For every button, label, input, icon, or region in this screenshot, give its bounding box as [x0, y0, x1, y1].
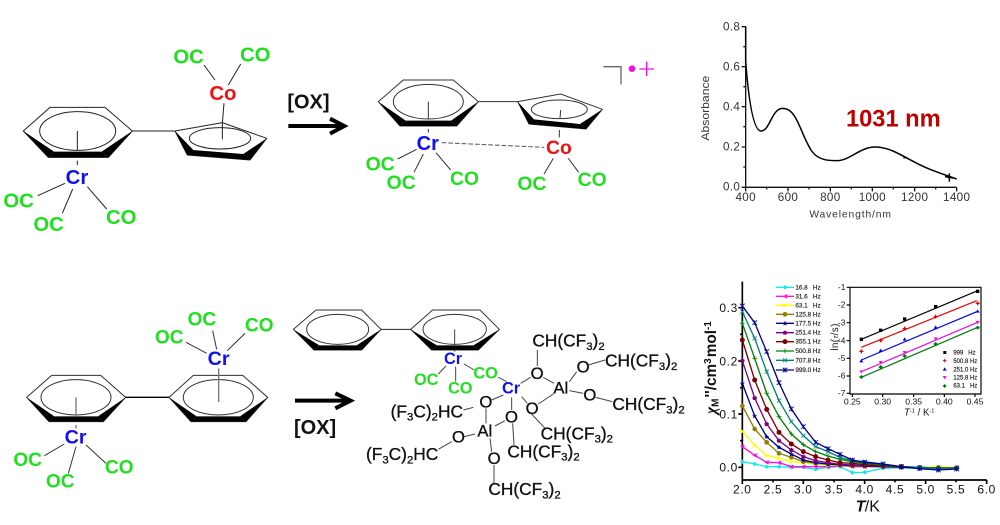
bracket and radical cation charge: [603, 62, 654, 84]
fluoroalkyl groups: HC: [413, 444, 438, 464]
x-axis tick labels: 5.5: [947, 483, 965, 497]
inset fit lines: [861, 291, 978, 377]
aluminate atoms: O: [526, 399, 539, 418]
inset x tick labels: 0.40: [936, 396, 953, 406]
fluoroalkyl groups: ): [673, 394, 678, 414]
chromium carbonyl labels: CO: [106, 207, 136, 229]
x-axis tick labels: 5.0: [916, 483, 935, 497]
aluminate atoms: O: [531, 364, 544, 383]
chart: absorbance spectrum: [700, 21, 970, 220]
y-axis title: -1: [703, 321, 714, 330]
inset legend: 500.8 Hz: [953, 359, 977, 365]
x-axis title: T/K: [856, 499, 880, 516]
fluoroalkyl groups: CH(CF: [488, 479, 542, 499]
molecule: oxidized radical cation: [366, 62, 654, 195]
fluoroalkyl groups: 2: [598, 341, 605, 353]
atom labels: OC: [188, 310, 216, 331]
aluminate atoms: O: [505, 408, 518, 427]
bonds: [38, 64, 241, 213]
atom labels: [366, 133, 607, 195]
inset y tick labels: [838, 282, 846, 398]
fluoroalkyl groups: C): [389, 444, 407, 464]
y-axis title: ''/cm: [703, 364, 720, 398]
bonds: [398, 102, 579, 174]
cobalt carbonyl labels: Co: [209, 83, 236, 105]
chromium carbonyl labels: OC: [414, 371, 439, 389]
inset x tick labels: 0.45: [967, 396, 984, 406]
aluminate atoms: O: [488, 449, 501, 468]
fluoroalkyl groups: 3: [659, 361, 665, 373]
frequency legend: 31.6 Hz: [795, 293, 821, 300]
fluoroalkyl groups: ): [549, 479, 554, 499]
x-axis tick labels: 4.5: [886, 483, 904, 497]
fluoroalkyl groups: 2: [671, 361, 677, 373]
chromium carbonyl labels: OC: [3, 190, 34, 212]
frequency legend: 707.8 Hz: [795, 357, 821, 364]
y-axis tick labels: [723, 21, 740, 194]
frequency legend: 16.8 Hz: [795, 284, 821, 291]
inset y tick labels: -7: [838, 388, 846, 398]
x-axis tick labels: 2.5: [764, 483, 782, 497]
aluminate atoms: [452, 358, 596, 468]
benzene ring: [23, 107, 132, 157]
chromium carbonyl labels: CO: [473, 364, 498, 382]
cobalt carbonyl labels: [173, 45, 270, 105]
fluoroalkyl groups: 3: [407, 412, 413, 424]
label: [OX]: [OX]: [294, 417, 336, 439]
atom labels: Cr: [417, 133, 439, 155]
y-axis tick labels: 0.0: [719, 461, 738, 475]
aluminate atoms: O: [577, 358, 590, 377]
x-axis tick labels: 1000: [859, 191, 886, 204]
y-axis tick labels: 0.6: [723, 60, 740, 73]
fluoroalkyl groups: ): [593, 331, 598, 351]
inset legend: 999 Hz: [953, 351, 976, 357]
y-axis title: 3: [703, 358, 714, 364]
fluoroalkyl groups: 2: [573, 452, 580, 464]
atom labels: Cr: [65, 426, 87, 448]
frequency legend: [776, 284, 821, 374]
cyclopentadienyl ring: [518, 94, 602, 129]
inset y tick labels: -5: [838, 353, 846, 363]
y-axis tick labels: 0.4: [723, 100, 740, 113]
atom labels: OC: [46, 472, 75, 493]
chromium carbonyl labels: OC: [33, 214, 64, 236]
frequency legend: 63.1 Hz: [795, 302, 821, 309]
y-axis title: M: [711, 399, 722, 407]
aluminate atoms: O: [583, 386, 596, 405]
fluoroalkyl groups: 3: [382, 454, 389, 466]
fluoroalkyl groups: CH(CF: [532, 331, 586, 351]
fluoroalkyl groups: 3: [595, 434, 601, 446]
peak label: 1031 nm: [846, 107, 941, 133]
chromium carbonyl labels: Cr: [444, 350, 463, 368]
chromium carbonyl labels: [414, 350, 521, 397]
x-axis tick labels: [735, 191, 970, 204]
x-axis tick labels: 4.0: [855, 483, 874, 497]
inset y tick labels: -1: [838, 282, 846, 292]
atom labels: CO: [105, 457, 133, 478]
y-axis title: Absorbance: [700, 76, 712, 141]
frequency legend: 999.0 Hz: [795, 367, 821, 374]
molecule: bis-chromium biphenyl: [13, 310, 273, 493]
inset legend: 125.8 Hz: [953, 375, 977, 381]
fluoroalkyl groups: CH(CF: [612, 394, 666, 414]
chart: out-of-phase magnetic susceptibility: [703, 282, 996, 516]
molecule: oxidized product with aluminate anion: [293, 310, 685, 501]
y-axis tick labels: 0.8: [723, 21, 740, 34]
frequency legend: 251.4 Hz: [795, 330, 821, 337]
inset axis titles: T: [904, 408, 911, 419]
fluoroalkyl groups: 2: [607, 434, 613, 446]
x-axis tick labels: 1400: [943, 191, 970, 204]
dashed Cr–Co interaction: [442, 143, 544, 147]
inset x tick labels: 0.30: [874, 396, 891, 406]
inset axis titles: ln(τ/s): [830, 323, 841, 351]
x-axis tick labels: 3.0: [794, 483, 813, 497]
x-axis tick labels: 3.5: [825, 483, 843, 497]
inset axis titles: [830, 323, 934, 419]
cobalt carbonyl labels: OC: [173, 46, 204, 68]
bonds: [44, 331, 245, 473]
bonds: [438, 329, 612, 483]
atom labels: OC: [517, 174, 546, 195]
y-axis tick labels: [719, 301, 738, 475]
left benzene ring: [27, 375, 126, 422]
inset legend: 63.1 Hz: [953, 384, 977, 390]
right benzene ring: [169, 375, 268, 422]
inset axes: [847, 287, 981, 397]
frequency legend: 125.8 Hz: [795, 311, 821, 318]
inset axis titles: -1: [910, 408, 915, 414]
fluoroalkyl groups: 2: [554, 489, 561, 501]
atom labels: CO: [245, 316, 273, 337]
aluminate atoms: O: [479, 393, 492, 412]
aluminate atoms: O: [452, 428, 465, 447]
frequency legend: 177.5 Hz: [795, 320, 821, 327]
x-axis tick labels: [733, 483, 996, 497]
inset: Arrhenius plot: [830, 282, 984, 419]
fluoroalkyl groups: 3: [586, 341, 593, 353]
x-axis tick labels: 2.0: [733, 483, 752, 497]
fluoroalkyl groups: 2: [432, 412, 438, 424]
inset axis titles: -1: [929, 408, 934, 414]
atom labels: OC: [387, 173, 416, 194]
x-axis tick labels: 600: [778, 191, 798, 204]
atom labels: OC: [13, 450, 42, 471]
x-axis tick labels: 1200: [901, 191, 928, 204]
fluoroalkyl groups: 2: [678, 404, 685, 416]
label: [OX]: [OX]: [287, 91, 330, 113]
fluoroalkyl groups: 3: [542, 489, 549, 501]
fluoroalkyl groups: CH(CF: [507, 441, 561, 461]
y-axis tick labels: 0.2: [719, 354, 738, 368]
atom labels: CO: [450, 169, 479, 190]
x-axis tick labels: 6.0: [977, 483, 996, 497]
fluoroalkyl groups: CH(CF: [605, 351, 659, 371]
cobalt carbonyl labels: CO: [240, 45, 270, 67]
aluminate atoms: Al: [553, 378, 568, 397]
chromium carbonyl labels: CO: [448, 379, 473, 397]
fluoroalkyl groups: ): [568, 441, 573, 461]
x-axis tick labels: 800: [820, 191, 841, 204]
atom labels: Cr: [208, 348, 230, 370]
fluoroalkyl groups: (F: [391, 401, 407, 421]
frequency legend: 355.1 Hz: [795, 339, 821, 346]
y-axis title: χ: [703, 406, 720, 416]
atom labels: [13, 310, 273, 493]
inset y tick labels: -2: [838, 300, 846, 310]
data series: [742, 306, 957, 473]
atom labels: Co: [546, 138, 572, 159]
inset y tick labels: -4: [838, 335, 846, 345]
aluminate atoms: Al: [477, 422, 492, 441]
fluoroalkyl groups: 3: [561, 452, 568, 464]
cyclopentadienyl ring: [175, 123, 267, 160]
axes: [738, 282, 987, 484]
chromium carbonyl labels: Cr: [66, 167, 88, 189]
fluoroalkyl groups: ): [601, 423, 607, 443]
benzene ring: [378, 80, 478, 126]
inset x tick labels: [844, 396, 984, 406]
molecule: Cr benzene – Co cyclopentadienyl complex: [3, 45, 344, 236]
spectrum curve: [746, 27, 957, 182]
atom labels: OC: [366, 155, 395, 176]
inset legend: 251.0 Hz: [953, 368, 977, 374]
arrow: oxidation: [288, 119, 344, 134]
frequency legend: 500.8 Hz: [795, 348, 821, 355]
y-axis tick labels: 0.0: [723, 181, 740, 194]
fluoroalkyl groups: (F: [366, 444, 382, 464]
atom labels: CO: [578, 170, 607, 191]
chromium carbonyl labels: Cr: [502, 379, 521, 397]
chromium carbonyl labels: [3, 167, 136, 236]
inset legend: [943, 351, 977, 390]
fluoroalkyl groups: 3: [666, 404, 673, 416]
y-axis title: mol: [703, 330, 720, 357]
x-axis tick labels: 400: [735, 191, 756, 204]
y-axis tick labels: 0.2: [723, 141, 740, 154]
fluoroalkyl groups: HC: [438, 401, 463, 421]
atom labels: OC: [155, 327, 184, 348]
inset data points: [859, 290, 980, 379]
inset axis titles: / K: [915, 408, 930, 419]
axes: [742, 27, 957, 191]
inset x tick labels: 0.35: [905, 396, 922, 406]
benzene rings: [293, 310, 499, 350]
inset x tick labels: 0.25: [844, 396, 861, 406]
fluoroalkyl groups: ): [665, 351, 671, 371]
arrow: oxidation: [295, 393, 351, 408]
y-axis tick labels: 0.3: [719, 301, 738, 315]
fluoroalkyl groups: 2: [407, 454, 413, 466]
x-axis title: Wavelength/nm: [809, 209, 892, 220]
fluoroalkyl groups: C): [413, 401, 432, 421]
y-axis tick labels: 0.1: [719, 407, 738, 421]
fluoroalkyl groups: CH(CF: [541, 423, 595, 443]
inset y tick labels: -3: [838, 317, 846, 327]
inset y tick labels: -6: [838, 371, 846, 381]
fluoroalkyl groups: [366, 331, 685, 501]
